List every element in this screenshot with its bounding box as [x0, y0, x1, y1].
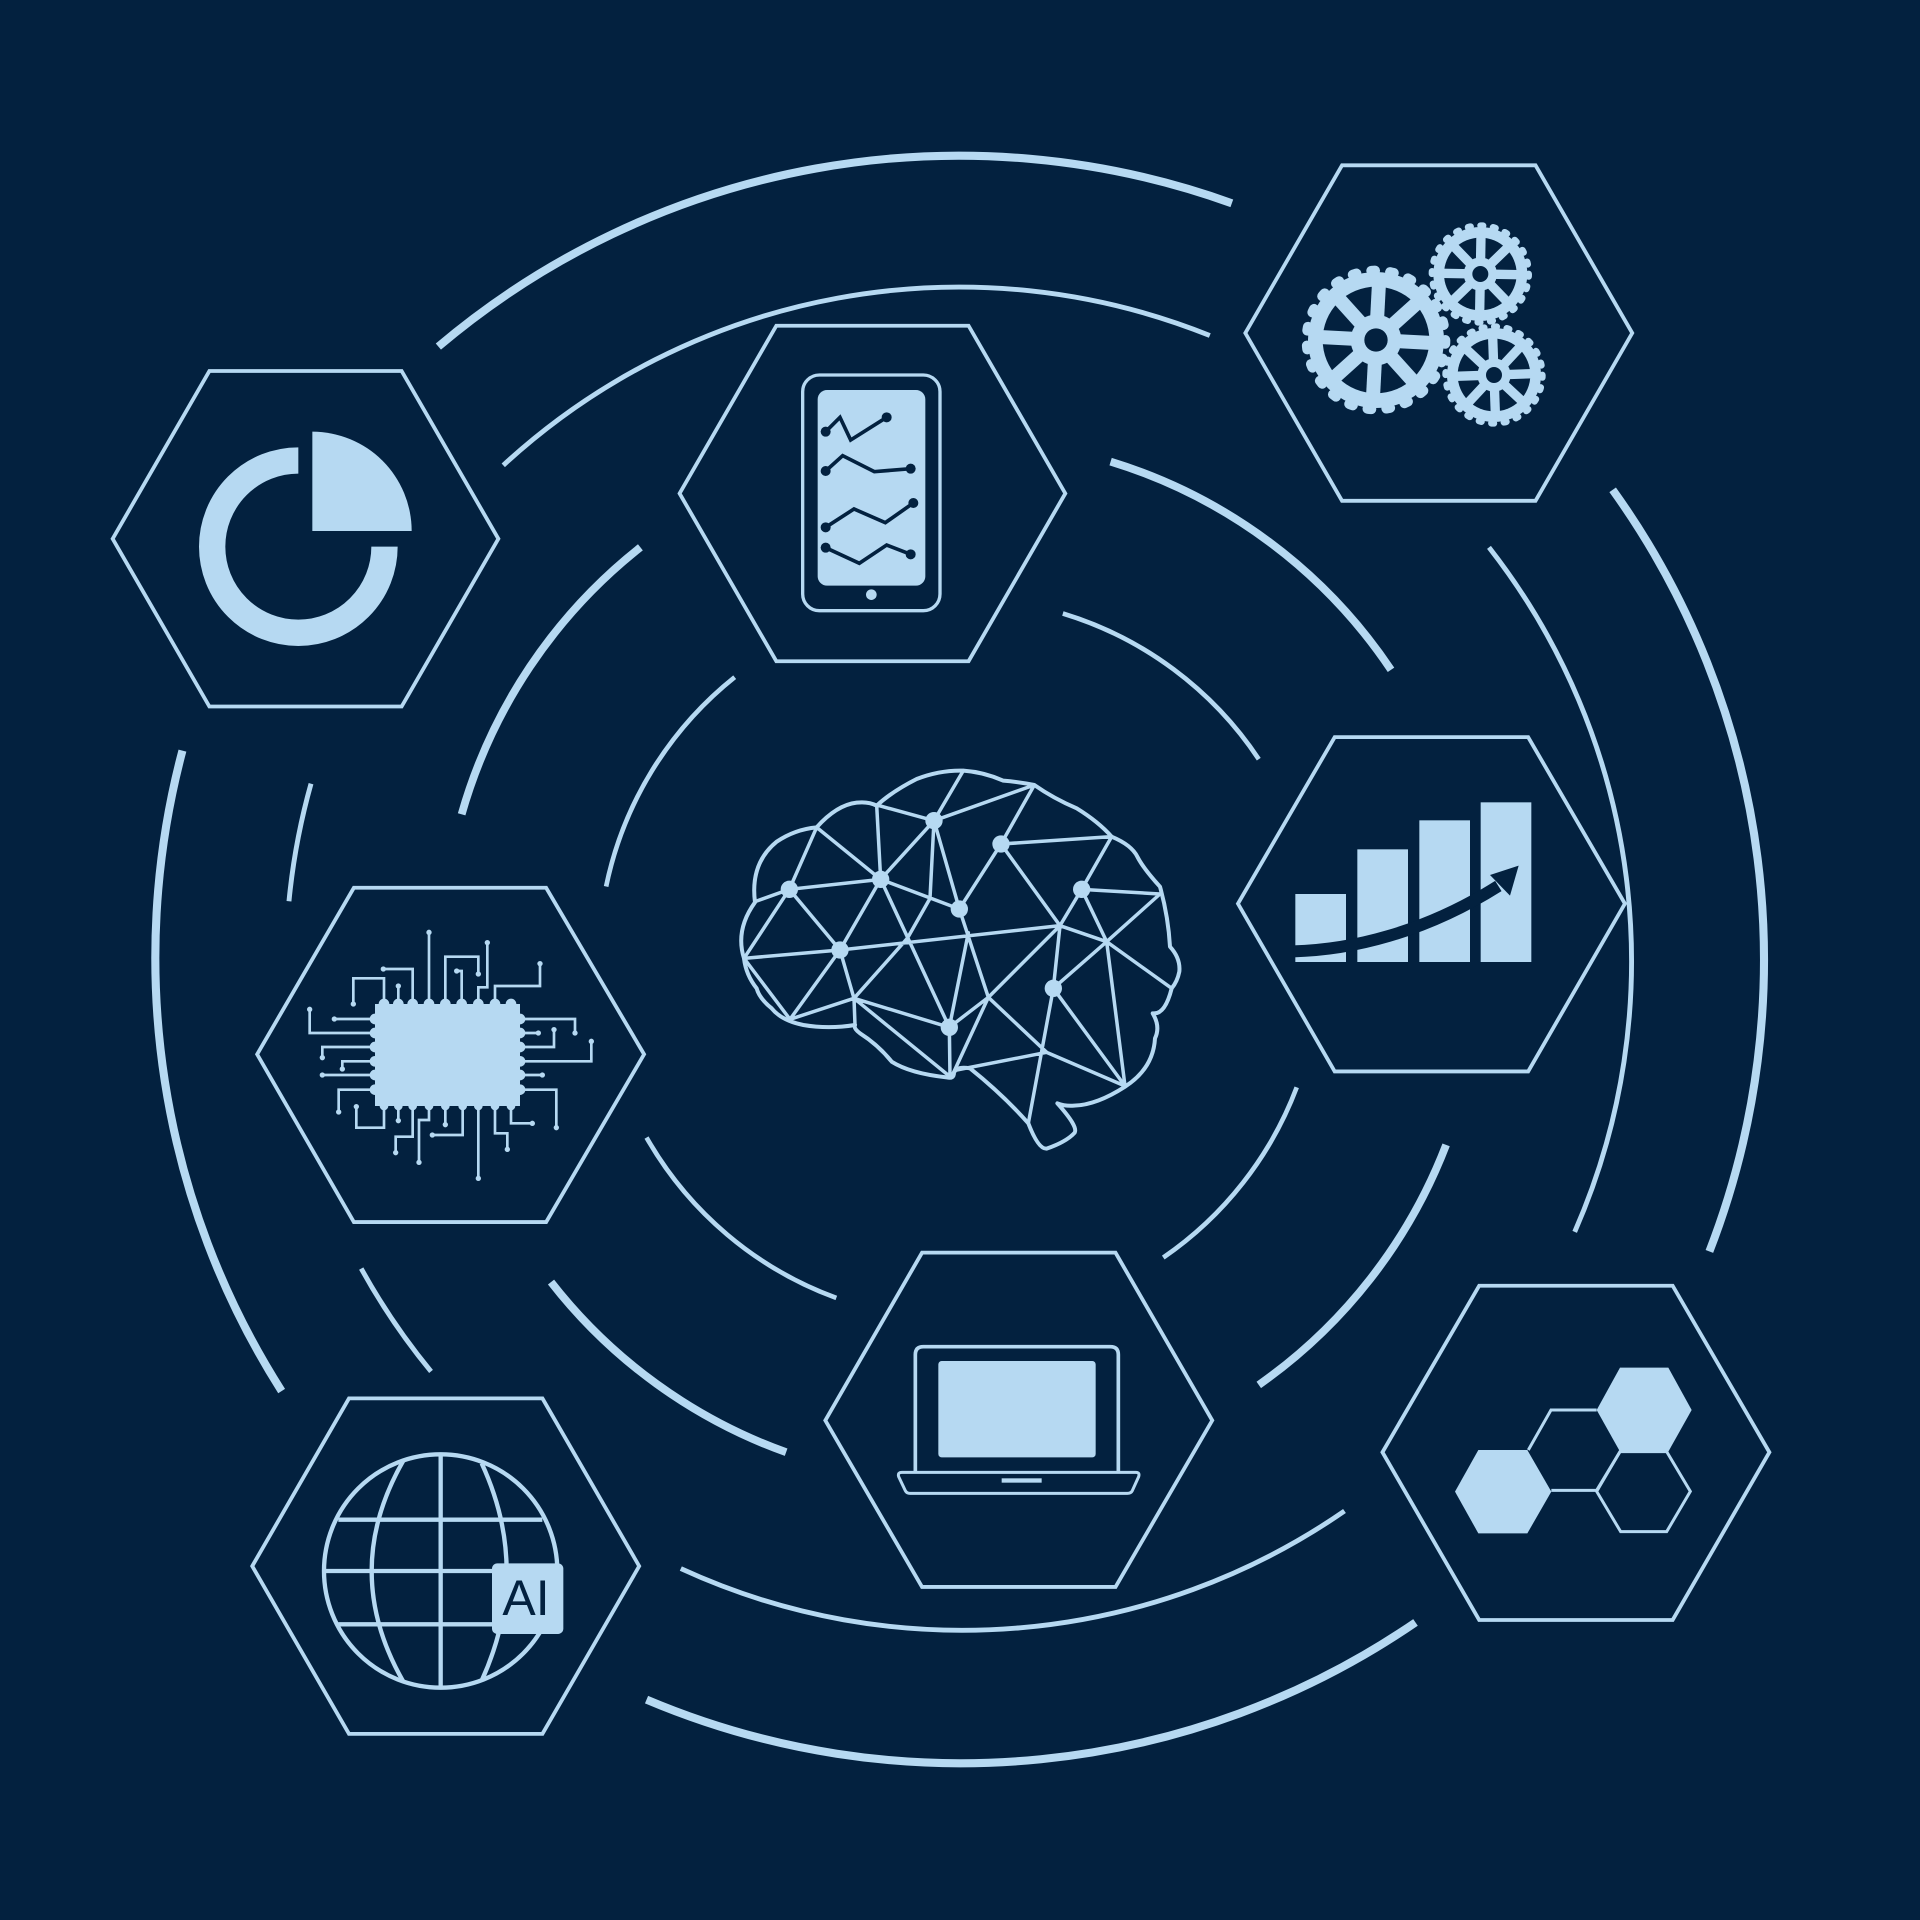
trace end dots — [307, 930, 594, 1181]
icon: phone with line charts — [803, 375, 940, 611]
filled left hexagon — [1455, 1450, 1551, 1533]
globe grid — [324, 1454, 557, 1688]
hexagon: laptop — [825, 1253, 1212, 1587]
brain nodes — [781, 812, 1090, 1036]
icon: microchip — [307, 930, 594, 1181]
phone button — [866, 589, 877, 600]
icon: honeycomb — [1455, 1368, 1692, 1533]
hexagon: pie chart — [113, 371, 498, 707]
icon: bar chart with arrow — [1293, 802, 1531, 962]
AI badge: AI — [502, 1570, 550, 1626]
laptop screen — [938, 1361, 1096, 1457]
hexagon: globe — [252, 1398, 639, 1734]
trackpad — [1002, 1478, 1042, 1483]
lower gear — [1446, 327, 1542, 423]
hexagon: gears — [1245, 165, 1632, 501]
large gear — [1307, 271, 1445, 409]
brain mesh lines — [744, 771, 1172, 1123]
outlined middle hexagon — [1528, 1410, 1620, 1490]
icon: pie chart — [212, 432, 412, 633]
donut ring — [212, 460, 384, 633]
hexagon: phone — [680, 326, 1065, 661]
inner ring arcs — [606, 613, 1297, 1298]
icon: gears — [1307, 226, 1542, 423]
upper gear — [1432, 226, 1529, 322]
third ring arcs — [462, 462, 1446, 1452]
growth arrow — [1293, 866, 1519, 951]
hexagon: bar chart — [1238, 737, 1625, 1071]
chart end dots — [821, 412, 918, 559]
outer ring arcs — [155, 156, 1764, 1763]
hexagon: chip — [257, 888, 644, 1222]
phone body — [803, 375, 940, 611]
second ring arcs — [289, 287, 1632, 1630]
laptop lid — [915, 1347, 1118, 1471]
phone screen — [818, 390, 925, 586]
chip traces — [310, 932, 591, 1178]
hexagon frames — [113, 165, 1769, 1734]
bars — [1295, 802, 1531, 962]
filled right hexagon — [1597, 1368, 1692, 1452]
AI badge — [492, 1563, 563, 1634]
pie slice — [312, 432, 412, 531]
laptop base — [898, 1472, 1139, 1493]
icon: laptop — [898, 1347, 1139, 1493]
outlined lower hexagon — [1597, 1452, 1690, 1532]
hexagon: honeycomb — [1382, 1286, 1769, 1620]
brain outline — [741, 771, 1179, 1149]
icon: globe with AI badge — [324, 1454, 563, 1688]
screen line charts — [826, 417, 913, 563]
concentric segmented rings — [155, 156, 1764, 1763]
chip body with pads — [370, 999, 525, 1110]
icon: brain network — [741, 771, 1179, 1149]
